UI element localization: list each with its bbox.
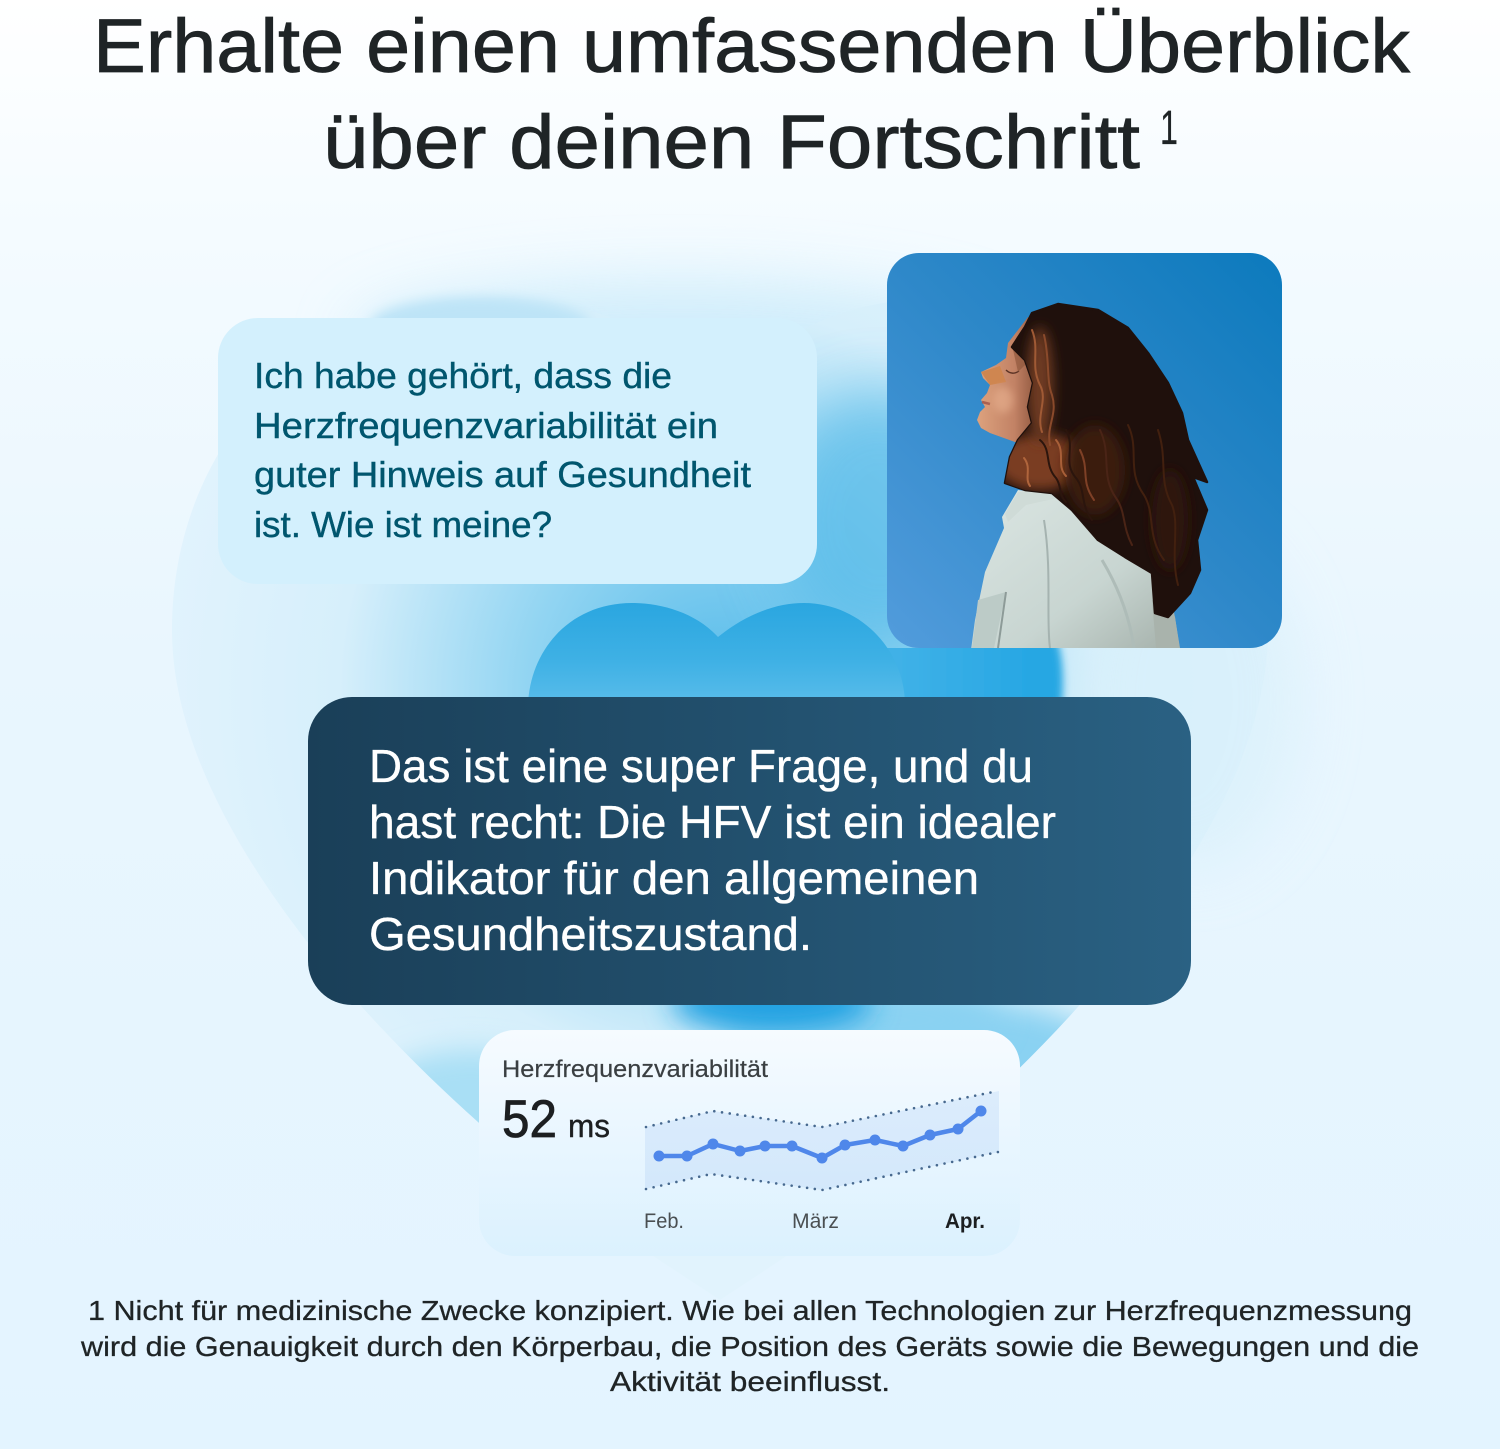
hair (996, 304, 1207, 617)
lower heart glow (360, 390, 1110, 1170)
big heart shape (172, 298, 1268, 1300)
background heart (172, 259, 1285, 1123)
range band (645, 1091, 999, 1190)
metric value (502, 1090, 610, 1149)
month labels: Feb. (644, 1210, 684, 1233)
user question bubble (218, 318, 817, 584)
face (977, 317, 1032, 442)
question text: guter Hinweis auf Gesundheit (254, 454, 751, 495)
right glow (1080, 530, 1300, 870)
title (93, 4, 1411, 185)
metric value: ms (568, 1108, 610, 1144)
question text: ist. Wie ist meine? (254, 504, 552, 545)
right blue band (888, 648, 1070, 697)
inner heart (528, 603, 905, 705)
lower range line (646, 1152, 998, 1190)
sky (887, 253, 1282, 648)
line chart (645, 1091, 999, 1190)
title line 1: Erhalte einen umfassenden Überblick (93, 4, 1411, 89)
footnote marker: 1 (1160, 102, 1178, 155)
month labels (644, 1210, 985, 1233)
heart rate variability card (479, 1030, 1020, 1256)
lobe highlight (370, 297, 590, 353)
footnote: 1 Nicht für medizinische Zwecke konzipiert. Wie bei allen Technologien zur Herzfrequenzmessung (88, 1295, 1412, 1326)
question text (254, 355, 751, 545)
footnote: wird die Genauigkeit durch den Körperbau, die Position des Geräts sowie die Bewegungen und die (80, 1331, 1419, 1362)
title line 2: über deinen Fortschritt (323, 100, 1140, 185)
answer text: Gesundheitszustand. (369, 908, 812, 960)
soft glow around heart top (350, 280, 1010, 400)
footnote (80, 1295, 1419, 1397)
assistant answer bubble (308, 697, 1191, 1005)
question text: Ich habe gehört, dass die (254, 355, 672, 396)
data points (654, 1106, 986, 1164)
hair strands (1024, 330, 1178, 585)
answer text: Das ist eine super Frage, und du (369, 740, 1033, 792)
question text: Herzfrequenzvariabilität ein (254, 405, 718, 446)
answer text (369, 740, 1056, 960)
bubble background (218, 318, 817, 584)
footnote: Aktivität beeinflusst. (610, 1366, 890, 1397)
bottom blue glow (672, 973, 872, 1033)
month labels: Apr. (945, 1210, 985, 1233)
bubble background (308, 697, 1191, 1005)
jacket (971, 490, 1180, 650)
facial details (981, 350, 1025, 414)
data line (659, 1111, 981, 1158)
answer text: Indikator für den allgemeinen (369, 852, 979, 904)
hair base (1005, 304, 1207, 617)
hair warm tones (996, 327, 1188, 585)
photo: woman in profile against blue sky (887, 253, 1282, 650)
card heading: Herzfrequenzvariabilität (502, 1056, 768, 1083)
month labels: März (792, 1210, 839, 1233)
metric value: 52 (502, 1090, 557, 1149)
answer text: hast recht: Die HFV ist ein idealer (369, 796, 1056, 848)
card background (479, 1030, 1020, 1256)
upper range line (646, 1091, 998, 1127)
